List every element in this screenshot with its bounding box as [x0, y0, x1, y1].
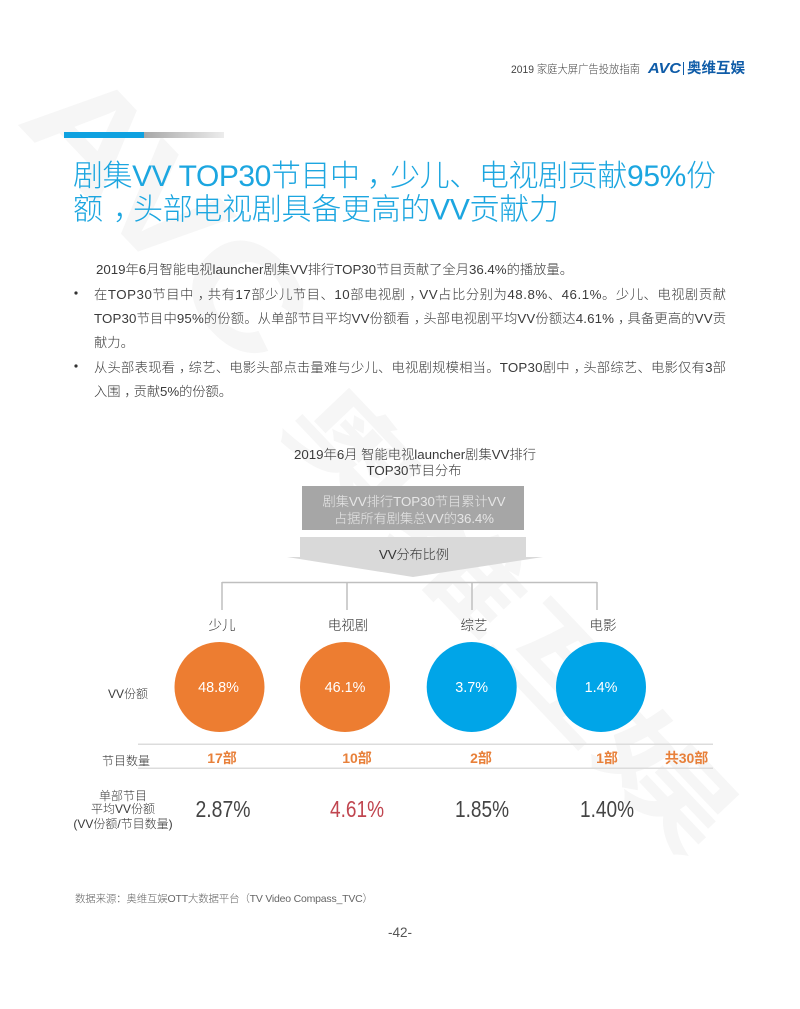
chart heading: 2019年6月 智能电视launcher剧集VV排行 [294, 447, 536, 462]
logo: AVC: AVC [647, 60, 682, 77]
title [73, 160, 716, 226]
bullet 2: 从头部表现看 ，综艺、电影头部点击量难与少儿、电视剧规模相当。TOP30剧中 ，头部综艺、电影仅有3部 [94, 360, 726, 375]
circle: kids [174, 642, 264, 732]
circle: variety: 3.7% [455, 680, 488, 696]
category labels: 综艺 [460, 618, 488, 633]
average share row [73, 789, 634, 831]
watermark: 奥维互娱 [263, 364, 755, 874]
program count row: 1部 [596, 750, 618, 766]
source: 数据来源：奥维互娱OTT大数据平台（TV Video Compass_TVC） [75, 892, 373, 905]
page number: -42- [388, 925, 412, 940]
watermark: AVC [0, 35, 345, 393]
circle: TV drama [300, 642, 390, 732]
title: 少儿、电视剧贡献95%份 [390, 160, 716, 193]
program count row: 2部 [470, 750, 492, 766]
body text: 2019年6月智能电视launcher剧集VV排行TOP30节目贡献了全月36.4%的播放量。 [96, 262, 573, 277]
bullet 1 [74, 287, 726, 350]
title: ， [113, 194, 143, 226]
circle: movie [556, 642, 646, 732]
average share row: 1.40% [580, 796, 634, 822]
circle: kids: 48.8% [198, 680, 239, 696]
body text [74, 262, 726, 399]
bullet 1: 献力。 [94, 335, 134, 350]
circle: variety [427, 642, 517, 732]
row label: VV share: VV份额 [108, 687, 148, 701]
circle: movie: 1.4% [585, 680, 618, 696]
grey summary box: 剧集VV排行TOP30节目累计VV [322, 494, 506, 509]
title: 剧集VV TOP30节目中 [73, 160, 360, 193]
row label [73, 789, 173, 831]
accent bar [64, 132, 224, 138]
chart heading [294, 447, 536, 478]
bullet 2: 入围 ，贡献5%的份额。 [94, 384, 232, 399]
logo: divider [683, 62, 684, 75]
header [511, 59, 745, 77]
row label: (VV份额/节目数量) [73, 817, 173, 831]
bullet 1: 在TOP30节目中 ，共有17部少儿节目、10部电视剧 ，VV占比分别为48.8%、46.1%。少儿、电视剧贡献 [94, 287, 726, 302]
row label: 平均VV份额 [91, 802, 155, 816]
bullet 2 [74, 360, 726, 399]
title: ， [367, 160, 397, 193]
category labels: 电影 [590, 618, 616, 633]
grey summary box [302, 486, 524, 530]
category labels [208, 618, 616, 633]
down arrow: VV分布比例 [379, 547, 449, 562]
title: 头部电视剧具备更高的VV贡献力 [133, 194, 559, 226]
circle: TV drama: 46.1% [325, 680, 366, 696]
program count row: 17部 [207, 750, 237, 766]
row label: 单部节目 [99, 789, 147, 803]
header text: 2019 家庭大屏广告投放指南 [511, 62, 640, 76]
program count row: 节目数量 [102, 754, 150, 768]
down arrow [287, 537, 543, 577]
program count row: 10部 [342, 750, 372, 766]
average share row: 1.85% [455, 796, 509, 822]
connector tree [222, 582, 597, 610]
program count row [102, 744, 713, 769]
category labels: 少儿 [208, 618, 236, 633]
bullet 1: TOP30节目中95%的份额。从单部节目平均VV份额看 ，头部电视剧平均VV份额达4.61% ，具备更高的VV贡 [94, 311, 726, 326]
title: 额 [73, 194, 103, 226]
chart heading: TOP30节目分布 [366, 463, 462, 478]
program count row: 共30部 [665, 750, 708, 766]
average share row: 4.61% [330, 796, 384, 822]
logo: AOWEI: 奥维互娱 [687, 59, 745, 77]
average share row: 2.87% [196, 796, 250, 822]
grey summary box: 占据所有剧集总VV的36.4% [334, 511, 494, 526]
category labels: 电视剧 [328, 618, 368, 633]
